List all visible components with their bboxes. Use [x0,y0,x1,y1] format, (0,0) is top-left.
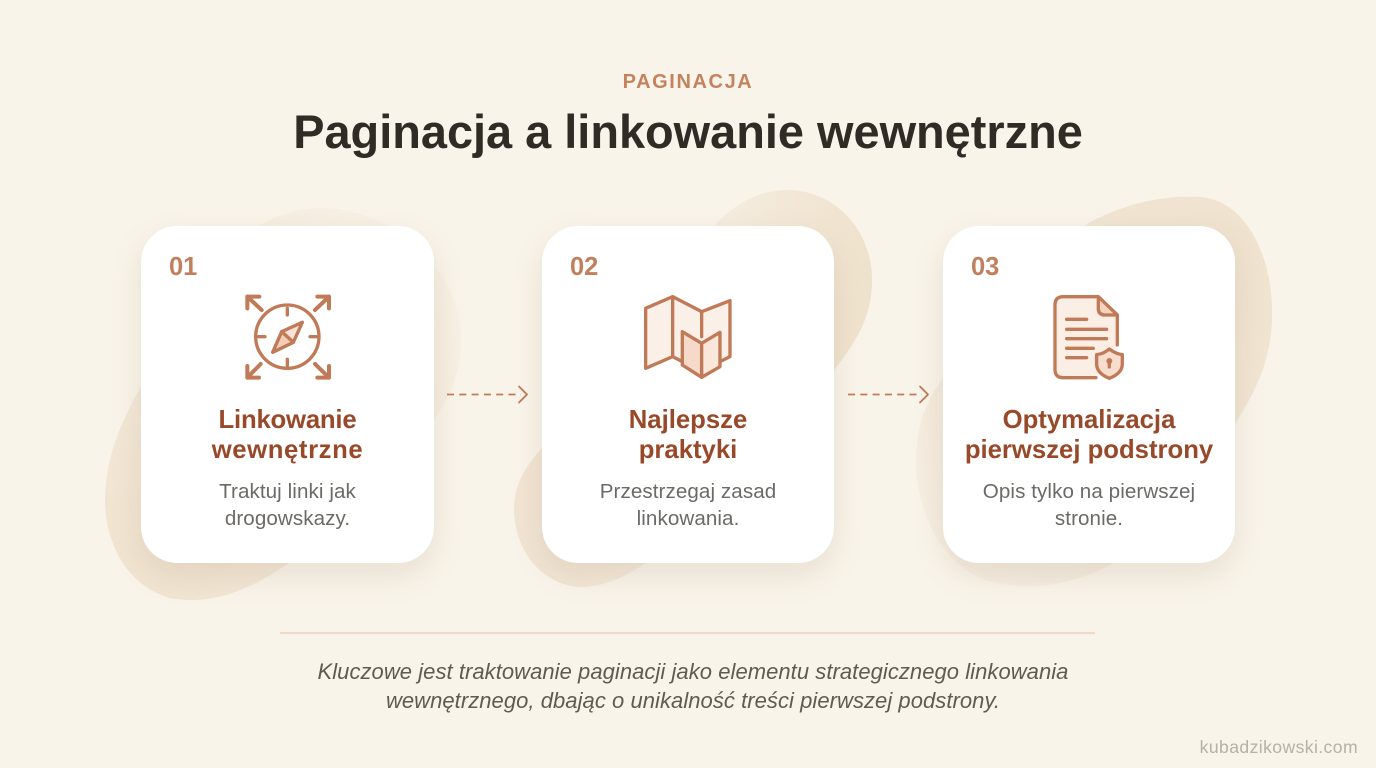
card heading: praktyki [639,436,737,464]
panel: card 3 [943,226,1235,563]
summary text [318,659,1068,712]
step number 02: 02 [570,253,598,281]
card description: drogowskazy. [225,507,350,530]
card heading: Linkowanie [219,406,356,434]
card heading: pierwszej podstrony [965,436,1213,464]
card heading: wewnętrzne [212,436,363,464]
step number 03: 03 [971,253,999,281]
card description [983,480,1195,530]
icon: folded map [644,295,732,379]
card description: stronie. [1055,507,1123,530]
icon: document with shield [1053,294,1124,380]
card heading [212,406,363,464]
step number 01: 01 [169,253,197,281]
eyebrow label: PAGINACJA [623,71,753,93]
panel: card 2 [542,226,834,563]
card description: linkowania. [637,507,739,530]
card heading [629,406,747,464]
summary text: wewnętrznego, dbając o unikalność treści pierwszej podstrony. [386,688,1000,712]
watermark: kubadzikowski.com [1200,737,1358,757]
card heading: Optymalizacja [1003,406,1175,434]
title: Paginacja a linkowanie wewnętrzne [293,106,1083,158]
card description [600,480,776,530]
card heading [965,406,1213,464]
card description: Przestrzegaj zasad [600,480,776,503]
arrow 2 to 3 [848,386,929,404]
arrow 1 to 2 [447,386,528,404]
icon: compass with arrows [245,294,332,380]
card description: Opis tylko na pierwszej [983,480,1195,503]
card description: Traktuj linki jak [219,480,356,503]
summary text: Kluczowe jest traktowanie paginacji jako elementu strategicznego linkowania [318,659,1068,684]
panel: card 1 [141,226,434,563]
card heading: Najlepsze [629,406,747,434]
card description [219,480,356,530]
divider [280,632,1095,634]
